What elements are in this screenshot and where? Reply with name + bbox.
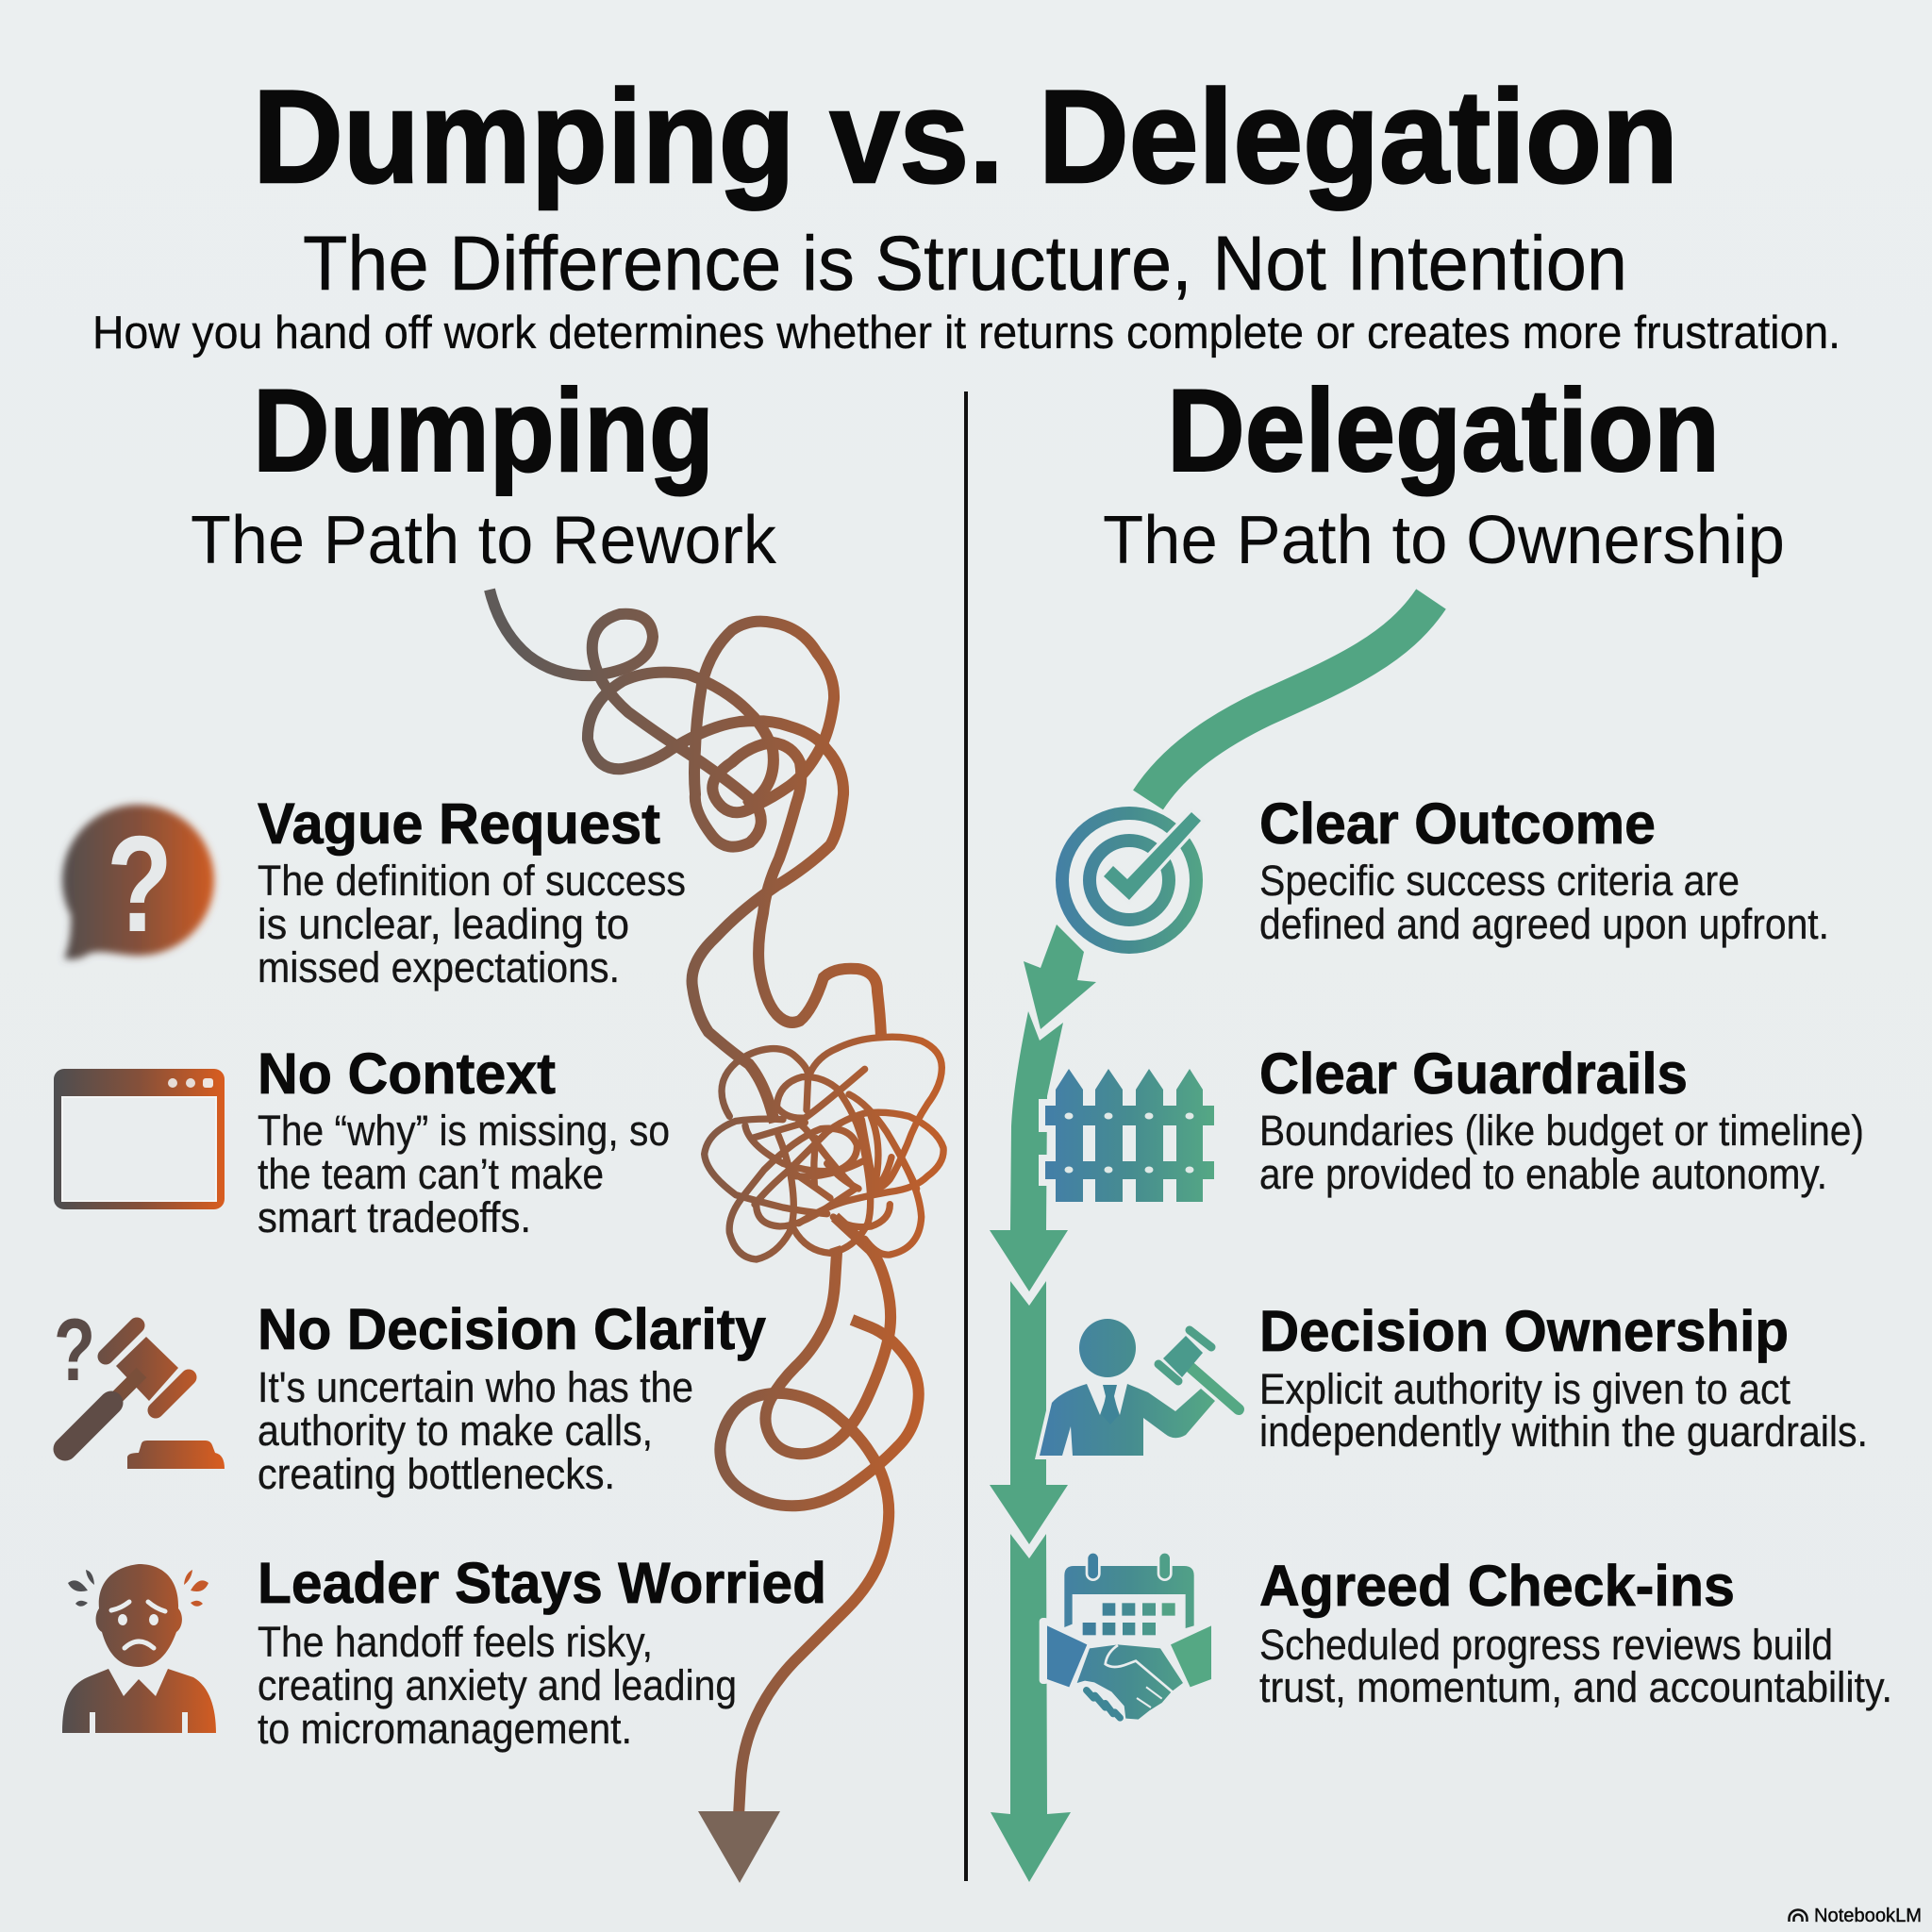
vague request text: The definition of success [258, 857, 686, 905]
item: no context [54, 1041, 670, 1241]
leader stays worried text [258, 1618, 737, 1753]
decision ownership text: independently within the guardrails. [1259, 1407, 1868, 1456]
dumping subheading: The Path to Rework [191, 503, 777, 578]
decision ownership heading: Decision Ownership [1259, 1299, 1789, 1363]
leader stays worried text: creating anxiety and leading [258, 1661, 737, 1709]
panel: delegation [990, 366, 1892, 1882]
title: Dumping vs. Delegation [253, 62, 1678, 210]
agreed check-ins heading: Agreed Check-ins [1259, 1554, 1735, 1618]
decision ownership text [1259, 1365, 1868, 1456]
clear guardrails text: Boundaries (like budget or timeline) [1259, 1107, 1864, 1155]
clear outcome text: Specific success criteria are [1259, 857, 1740, 905]
center divider [964, 391, 968, 1881]
no decision clarity text: It's uncertain who has the [258, 1363, 693, 1411]
icon: empty window [54, 1069, 225, 1209]
dumping heading: Dumping [253, 366, 714, 496]
no context text: The “why” is missing, so [258, 1107, 670, 1155]
item: vague request [62, 791, 686, 991]
no context text: the team can’t make [258, 1150, 604, 1198]
clear guardrails text: are provided to enable autonomy. [1259, 1150, 1827, 1198]
icon: gavel with question mark: ? [54, 1300, 95, 1399]
leader stays worried text: to micromanagement. [258, 1705, 632, 1753]
icon: person with gavel [1040, 1319, 1239, 1456]
delegation heading: Delegation [1167, 366, 1720, 496]
clear guardrails heading: Clear Guardrails [1259, 1041, 1688, 1106]
tangled path arrow [490, 590, 943, 1883]
no decision clarity text: creating bottlenecks. [258, 1450, 615, 1498]
item: clear guardrails [1039, 1041, 1864, 1202]
clear outcome text [1259, 857, 1829, 948]
no decision clarity text [258, 1363, 693, 1498]
agreed check-ins text: Scheduled progress reviews build [1259, 1621, 1833, 1669]
subtitle: The Difference is Structure, Not Intention [303, 221, 1627, 307]
vague request heading: Vague Request [258, 791, 660, 856]
leader stays worried heading: Leader Stays Worried [258, 1551, 826, 1615]
vague request text [258, 857, 686, 991]
no context text: smart tradeoffs. [258, 1193, 531, 1241]
item: clear outcome [1062, 791, 1829, 948]
vague request text: is unclear, leading to [258, 900, 629, 948]
no context heading: No Context [258, 1041, 556, 1106]
panel: dumping [54, 366, 943, 1883]
icon: question bubble [62, 805, 214, 960]
clear outcome heading: Clear Outcome [1259, 791, 1656, 856]
icon: fence [1039, 1069, 1214, 1202]
leader stays worried text: The handoff feels risky, [258, 1618, 653, 1666]
item: leader stays worried [62, 1551, 826, 1753]
icon: target with check [1062, 812, 1201, 947]
item: agreed check-ins [1040, 1551, 1892, 1720]
notebooklm badge: NotebookLM [1814, 1906, 1922, 1926]
clear guardrails text [1259, 1107, 1864, 1198]
icon: question bubble: ? [107, 808, 173, 960]
agreed check-ins text: trust, momentum, and accountability. [1259, 1663, 1892, 1711]
icon: gavel with question mark [54, 1300, 225, 1469]
item: decision ownership [1040, 1299, 1868, 1456]
icon: worried leader [62, 1564, 216, 1733]
vague request text: missed expectations. [258, 943, 620, 991]
intro sentence: How you hand off work determines whether it returns complete or creates more frustration. [92, 308, 1840, 358]
delegation subheading: The Path to Ownership [1103, 503, 1785, 578]
item: no decision clarity [54, 1297, 766, 1498]
no decision clarity heading: No Decision Clarity [258, 1297, 766, 1361]
icon: calendar and handshake [1040, 1551, 1211, 1720]
green stepped path arrows [990, 599, 1431, 1882]
clear outcome text: defined and agreed upon upfront. [1259, 900, 1829, 948]
no decision clarity text: authority to make calls, [258, 1407, 653, 1455]
agreed check-ins text [1259, 1621, 1892, 1711]
decision ownership text: Explicit authority is given to act [1259, 1365, 1790, 1413]
no context text [258, 1107, 670, 1241]
